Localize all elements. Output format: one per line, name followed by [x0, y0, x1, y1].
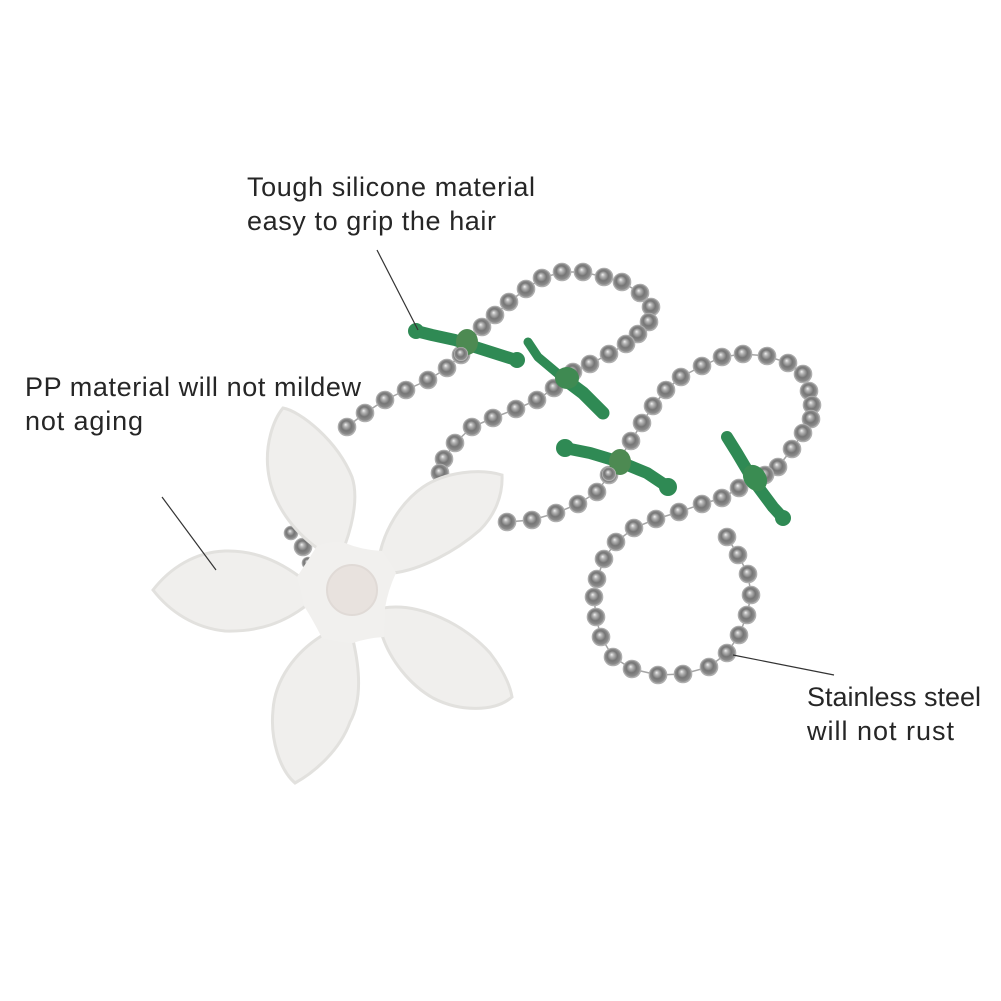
petal: bottom	[272, 635, 359, 783]
callout: PP material: not aging	[25, 406, 143, 436]
flower centre button	[327, 565, 377, 615]
silicone tie 2	[528, 342, 603, 413]
callout: silicone material	[247, 172, 535, 236]
chain beads behind flower	[284, 526, 314, 569]
chain: second strand with loop and open end	[498, 345, 821, 684]
chain: first strand with two loops	[338, 263, 660, 482]
petal: right	[380, 472, 502, 573]
petal: lower right	[382, 607, 512, 708]
petal: left	[153, 551, 307, 631]
silicone tie 4	[727, 437, 791, 526]
flower stopper	[153, 408, 512, 783]
callout: silicone material: easy to grip the hair	[247, 206, 496, 236]
callout: PP material	[25, 372, 362, 436]
petal: top	[267, 408, 355, 548]
silicone tie 3	[556, 439, 677, 496]
leader line: PP material	[162, 497, 216, 570]
callout: PP material: PP material will not mildew	[25, 372, 362, 402]
callout: stainless steel: will not rust	[806, 716, 954, 746]
flower hub	[297, 542, 396, 643]
callout: stainless steel: Stainless steel	[807, 682, 981, 712]
leader line: silicone	[377, 250, 418, 330]
callout: silicone material: Tough silicone material	[247, 172, 535, 202]
silicone tie 1	[408, 323, 525, 368]
callout: stainless steel	[806, 682, 981, 746]
leader line: stainless steel	[733, 655, 834, 675]
